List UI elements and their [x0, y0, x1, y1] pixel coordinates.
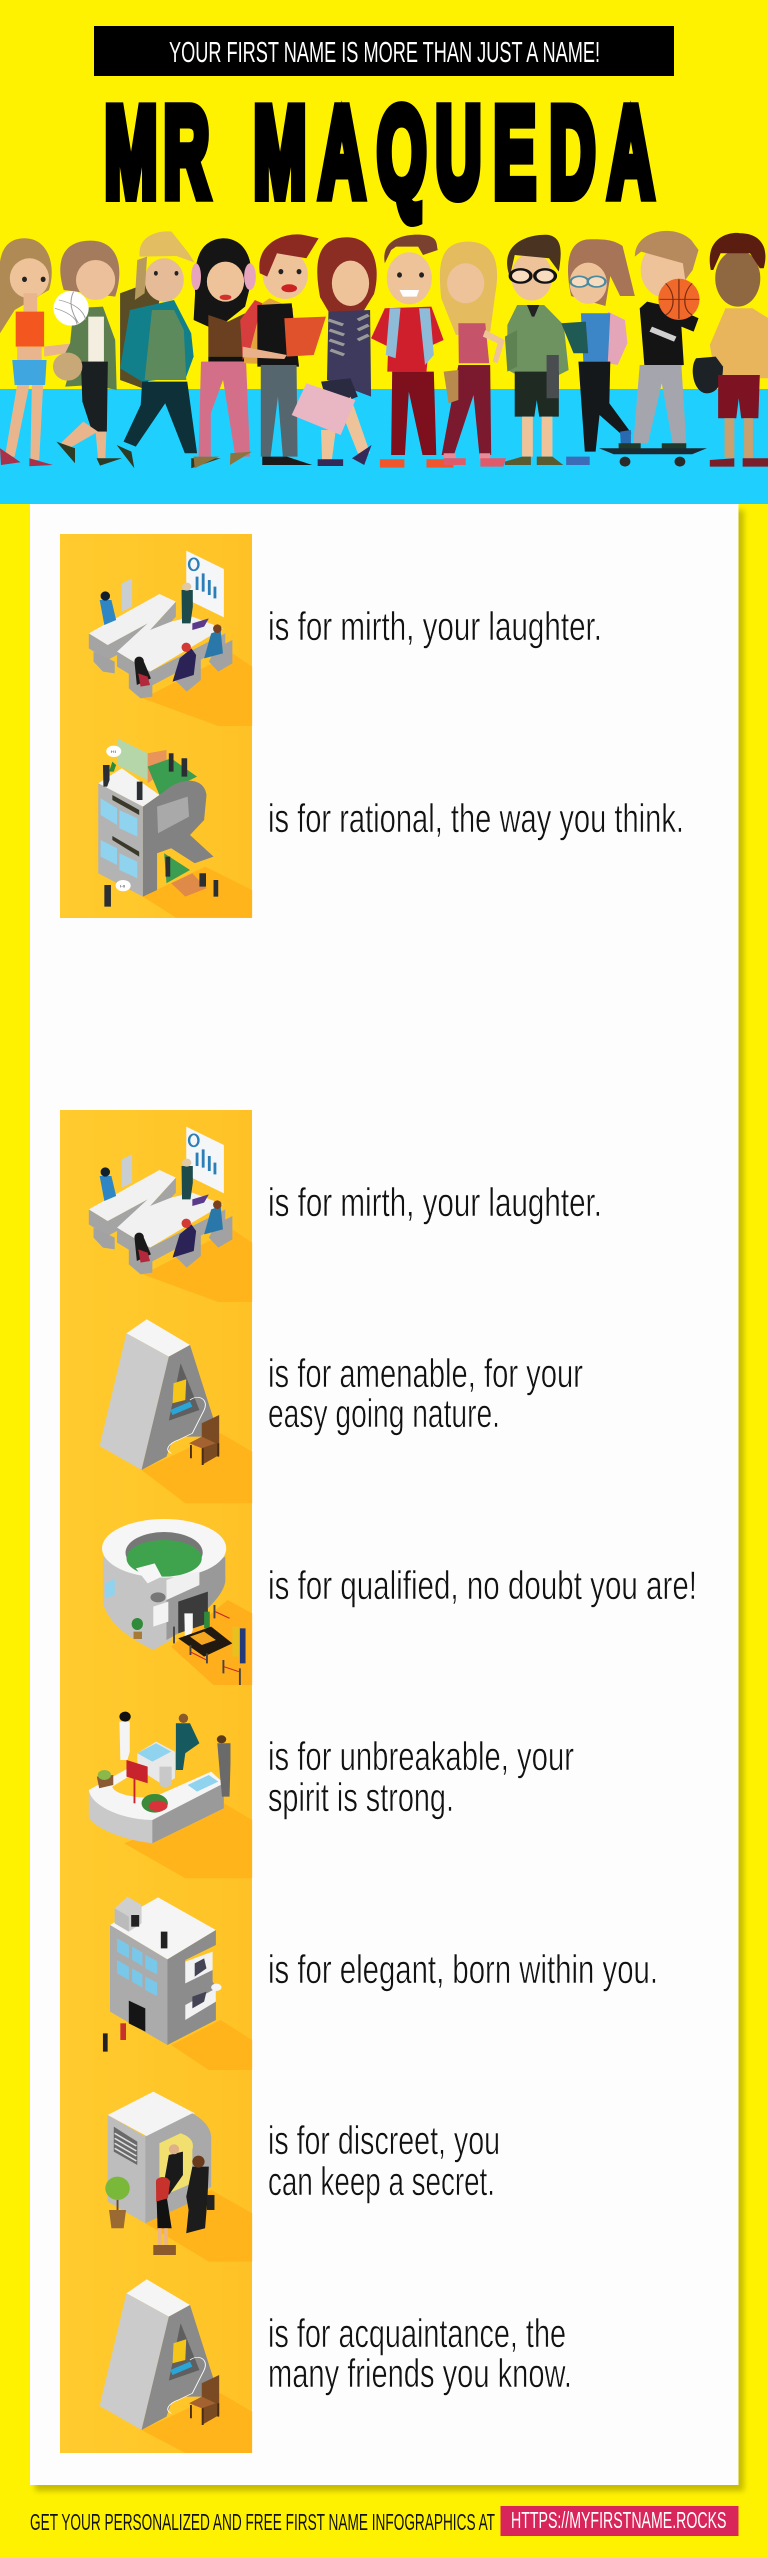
person 10: girl with blue glasses and tablet — [561, 239, 635, 465]
icon: letter M office — [89, 1127, 252, 1302]
whiteboard chart — [186, 1127, 224, 1193]
text: spirit: spirit is strong. — [268, 1776, 454, 1820]
text: discreet: is for discreet, you — [268, 2119, 500, 2163]
person 12: boy with curly hair and tank top — [693, 233, 768, 467]
panel shadow — [35, 510, 744, 2491]
icon: letter A desk — [100, 1319, 252, 1503]
icon: letter Q stadium — [102, 1519, 252, 1685]
text: many friends: many friends you know. — [268, 2352, 572, 2396]
icon: letter A desk — [100, 2279, 252, 2453]
icon: letter U counter — [89, 1712, 252, 1878]
icon: letter M office — [89, 551, 252, 726]
white content panel — [30, 504, 738, 2485]
person 9: boy with black glasses — [505, 235, 569, 465]
orange image column: surname — [60, 1110, 252, 2453]
text: mirth: is for mirth, your laughter. — [268, 1181, 602, 1225]
text: mirth: is for mirth, your laughter. — [268, 605, 602, 649]
speech bubble: HI — [116, 880, 131, 891]
text: amenable: is for amenable, for your — [268, 1352, 583, 1396]
icon: letter D doorway — [105, 2092, 252, 2262]
text: easy going: easy going nature. — [268, 1392, 500, 1436]
person 2: girl with volleyball — [53, 241, 122, 466]
speech bubble: HI — [106, 746, 121, 757]
whiteboard chart — [186, 551, 224, 617]
text: acquaintance: is for acquaintance, the — [268, 2312, 566, 2356]
person 5: boy with book and backpack — [240, 234, 326, 465]
icon: letter R building — [98, 738, 252, 918]
person 11: skateboarder with basketball — [599, 231, 707, 467]
orange image column: name — [60, 534, 252, 918]
person 1: girl in orange top — [0, 238, 76, 466]
text: keep a secret: can keep a secret. — [268, 2160, 495, 2204]
icon: letter E office block — [103, 1897, 252, 2070]
header banner — [94, 26, 674, 76]
blue floor band — [0, 389, 768, 504]
person 8: blonde girl — [440, 242, 506, 467]
text: unbreakable: is for unbreakable, your — [268, 1735, 574, 1779]
speech bubble: HI: HI — [120, 884, 126, 889]
person 4: girl with headphones — [191, 238, 256, 468]
person 3: boy with cap and backpack — [117, 231, 221, 468]
person 6: girl with pink bag — [292, 237, 377, 466]
illustration: group of twelve young people — [0, 231, 768, 468]
speech bubble: HI: HI — [110, 750, 116, 755]
person 7: boy in red shirt — [371, 235, 453, 468]
title: MR MAQUEDA — [104, 82, 654, 224]
